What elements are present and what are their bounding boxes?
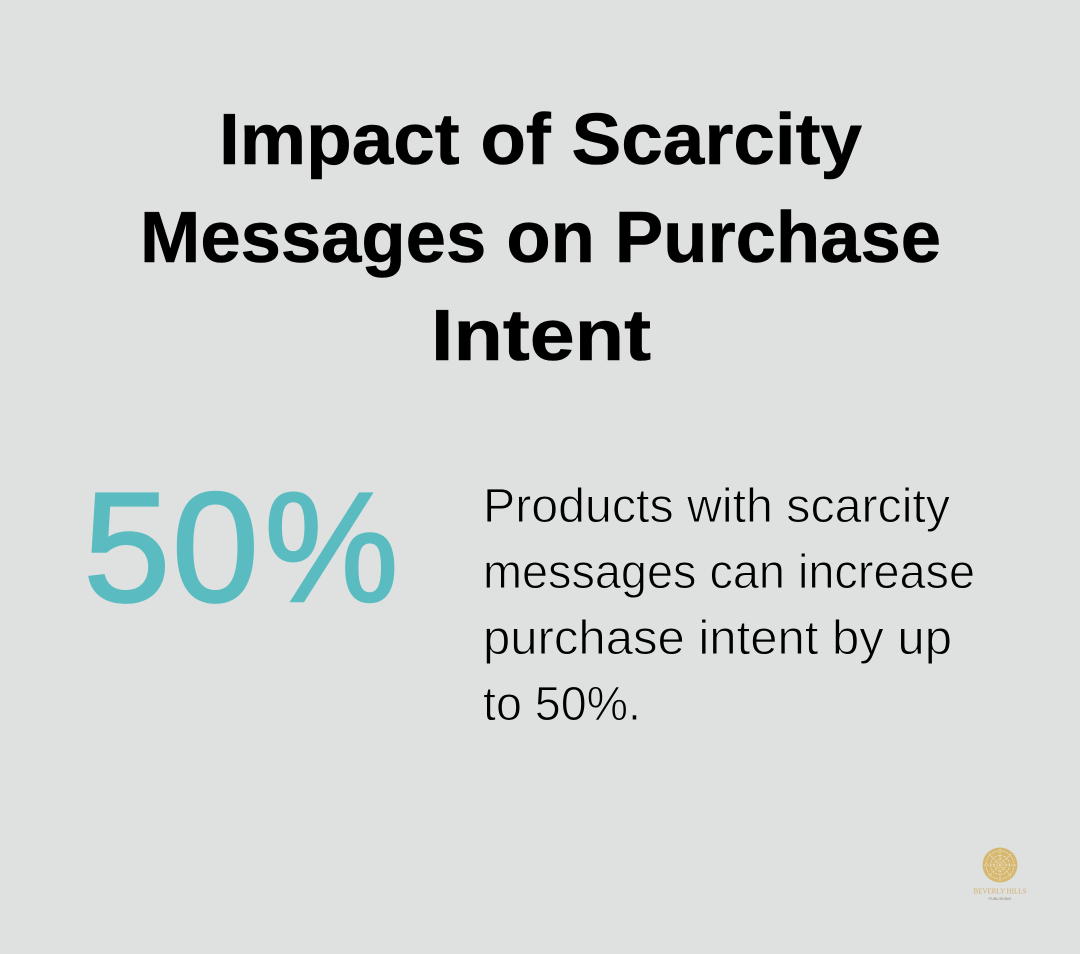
big statistic: 50%: 5 xyxy=(84,461,170,635)
logo wordmark: BEVERLY HILLS xyxy=(974,888,1027,896)
big statistic: 50%: 0 xyxy=(172,461,259,635)
title: Intent xyxy=(431,296,651,376)
description text: Products with scarcity xyxy=(483,480,950,533)
description text: to 50%. xyxy=(483,678,641,731)
big statistic: 50%: % xyxy=(264,461,398,635)
logo tagline: PUBLISHING xyxy=(988,896,1012,901)
title: Messages on Purchase xyxy=(140,198,941,278)
logo: Beverly Hills Publishing xyxy=(974,848,1027,901)
title: Impact of Scarcity xyxy=(219,100,862,180)
description text xyxy=(483,480,975,731)
title xyxy=(140,100,941,376)
icon: gold medallion xyxy=(982,848,1018,882)
description text: purchase intent by up xyxy=(483,612,952,665)
description text: messages can increase xyxy=(483,546,975,599)
